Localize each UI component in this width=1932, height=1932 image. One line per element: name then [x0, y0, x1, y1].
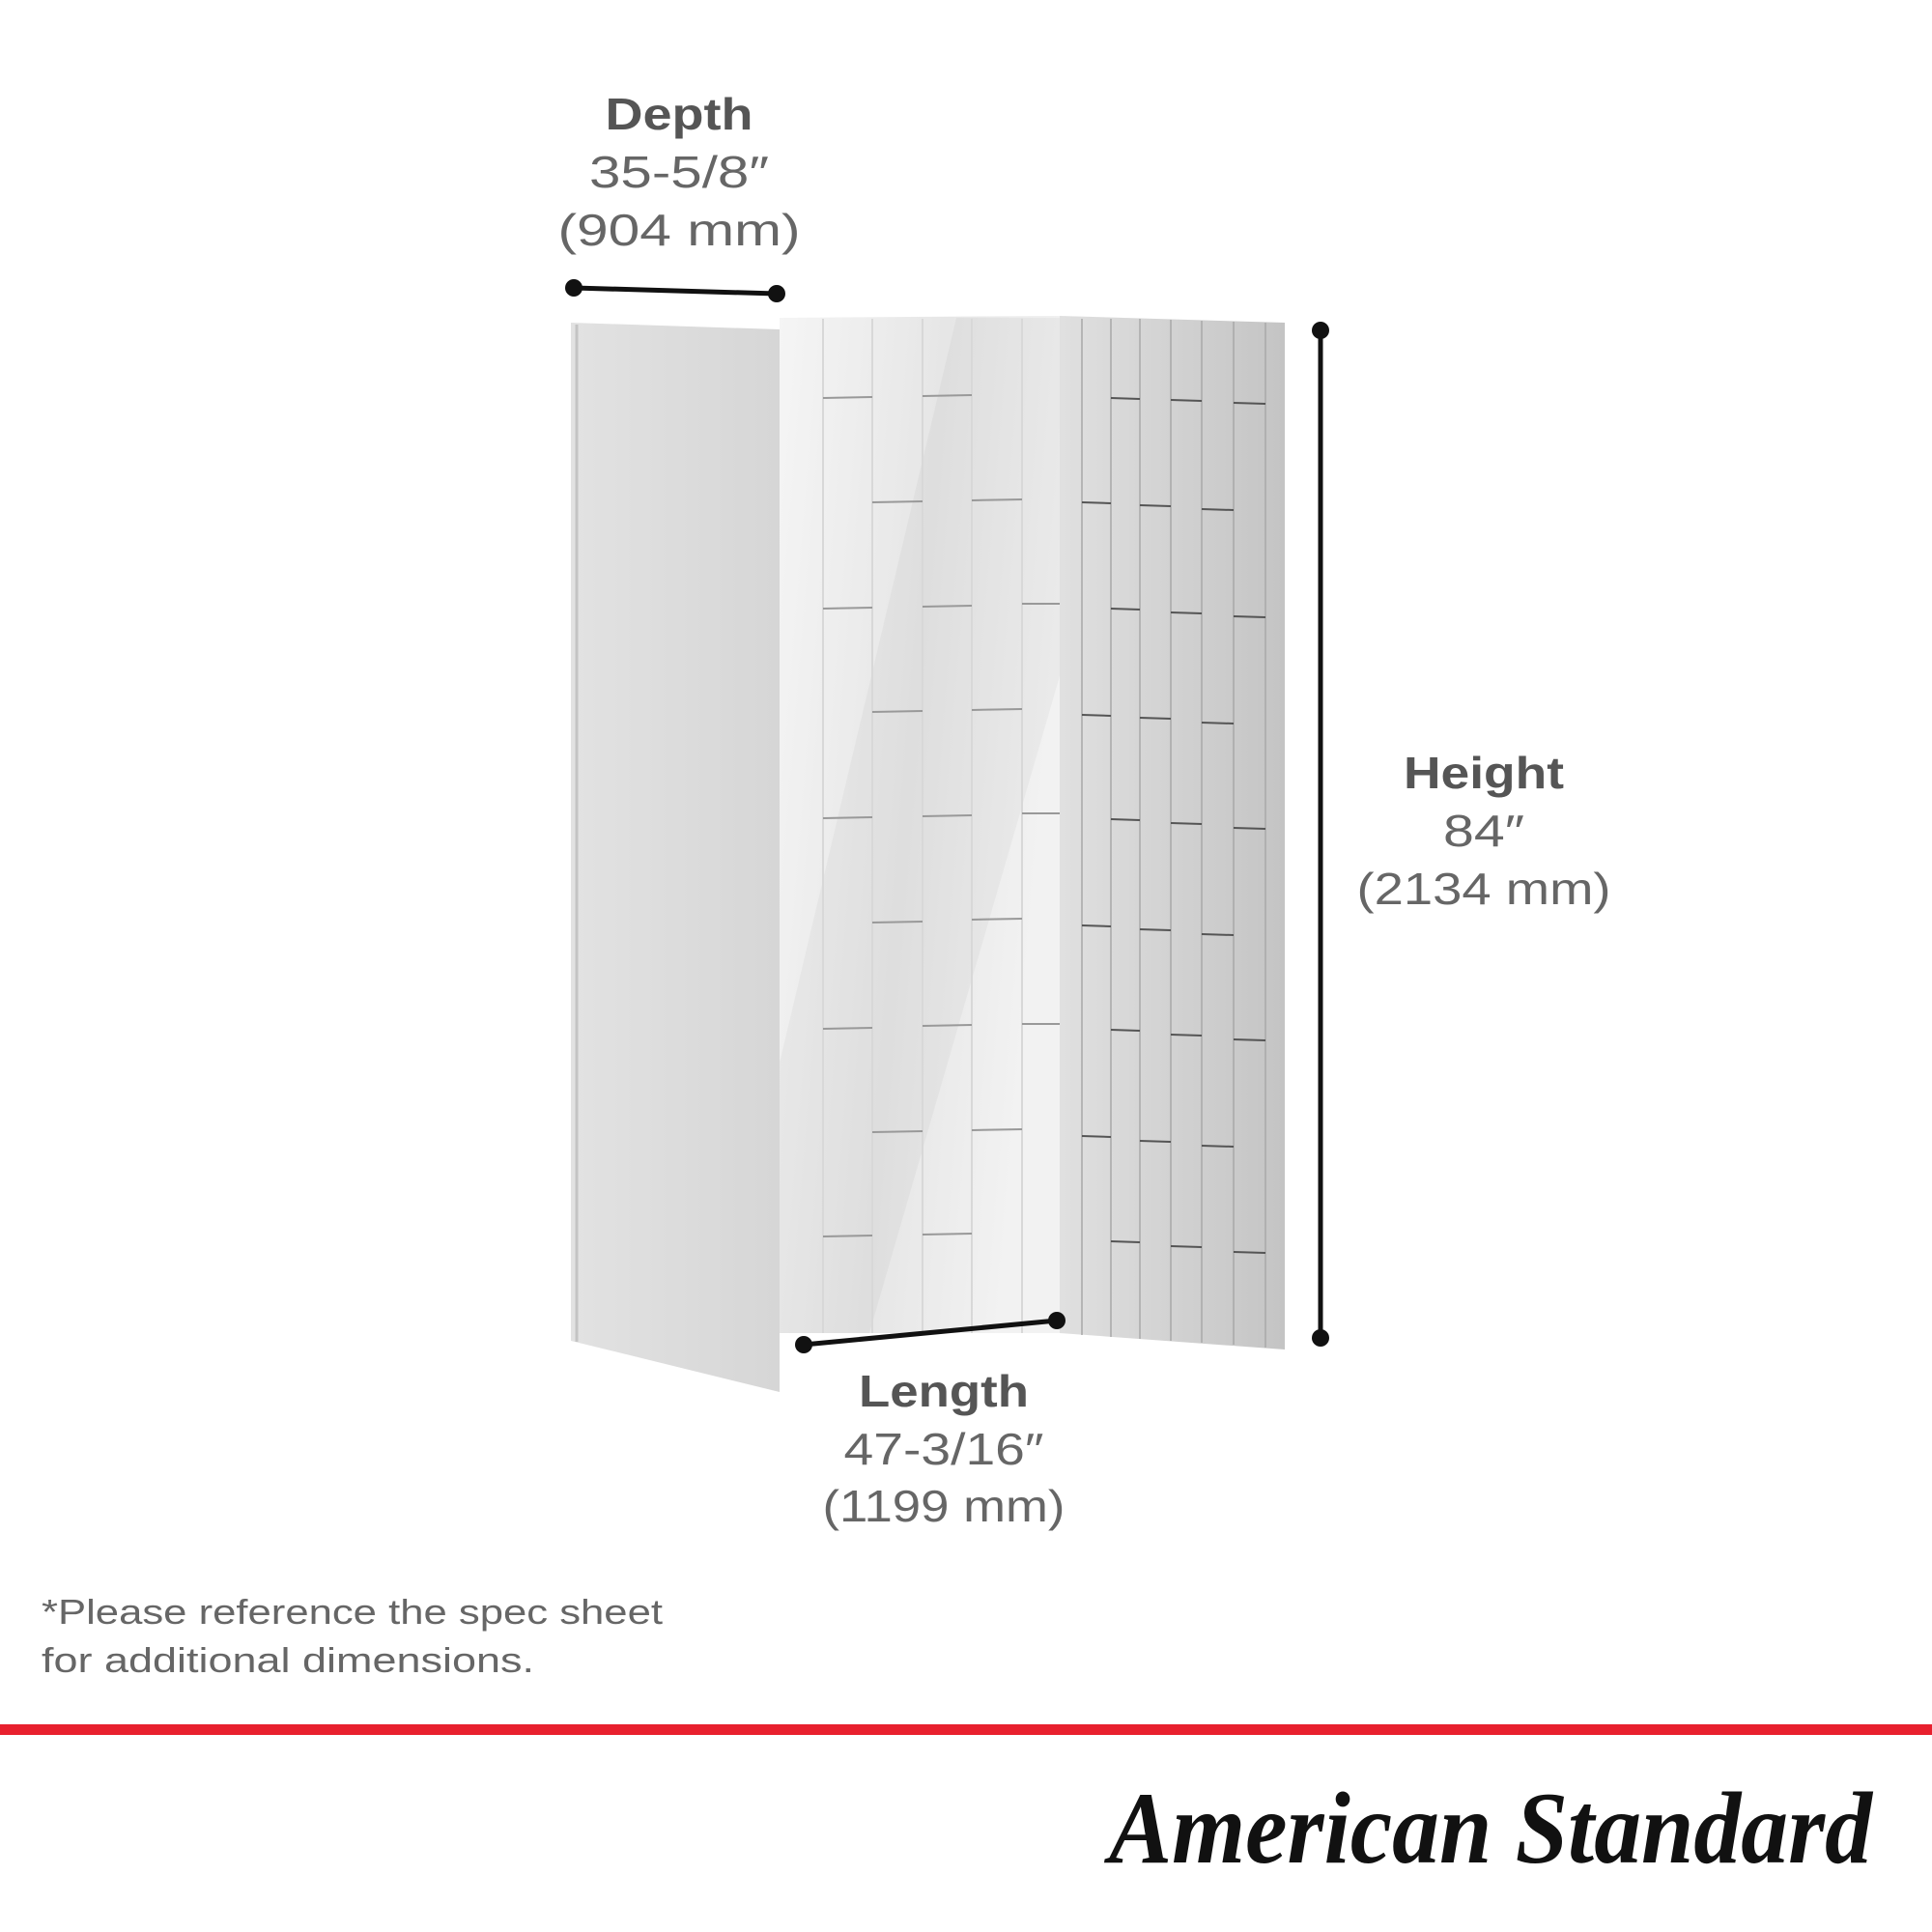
height label: Height — [1404, 748, 1564, 798]
length label: Length — [859, 1366, 1029, 1416]
depth label: 35-5/8″ — [589, 147, 769, 197]
depth label: (904 mm) — [558, 205, 800, 255]
footnote — [42, 1592, 663, 1680]
height label — [1356, 748, 1611, 914]
length label: 47-3/16″ — [844, 1424, 1043, 1474]
height dimension line — [1312, 322, 1329, 1347]
length label: (1199 mm) — [823, 1481, 1065, 1531]
height label: 84″ — [1443, 806, 1524, 856]
shower walls — [571, 316, 1285, 1392]
right wall — [1060, 316, 1285, 1350]
footnote: for additional dimensions. — [42, 1640, 534, 1680]
depth label — [558, 89, 800, 255]
left wall — [571, 323, 780, 1392]
length label — [823, 1366, 1065, 1531]
depth label: Depth — [605, 89, 753, 139]
footnote: *Please reference the spec sheet — [42, 1592, 663, 1632]
height label: (2134 mm) — [1356, 864, 1611, 914]
length dimension line — [795, 1312, 1065, 1353]
red divider — [0, 1724, 1932, 1735]
depth dimension line — [565, 279, 785, 302]
back wall — [780, 316, 1060, 1333]
logo: American Standard: American Standard — [1103, 1772, 1874, 1885]
